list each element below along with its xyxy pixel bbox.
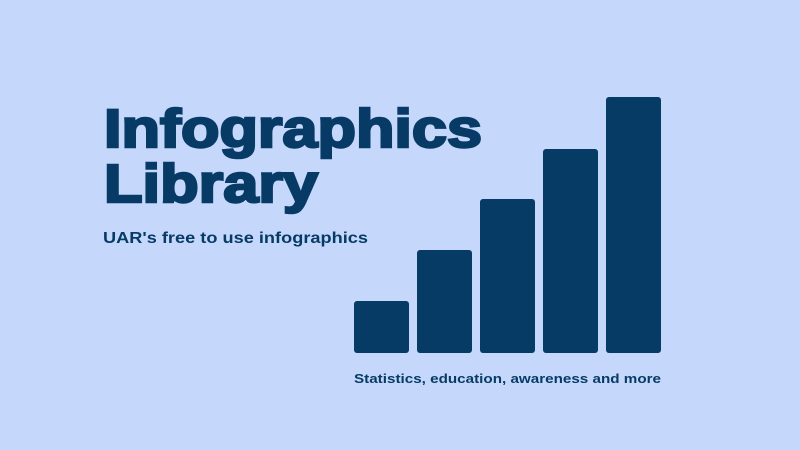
title: Infographics — [104, 99, 482, 159]
bar chart — [354, 97, 661, 353]
caption: Statistics, education, awareness and more — [354, 371, 661, 386]
title — [104, 99, 482, 214]
subtitle: UAR's free to use infographics — [103, 230, 368, 247]
title: Library — [104, 154, 318, 214]
